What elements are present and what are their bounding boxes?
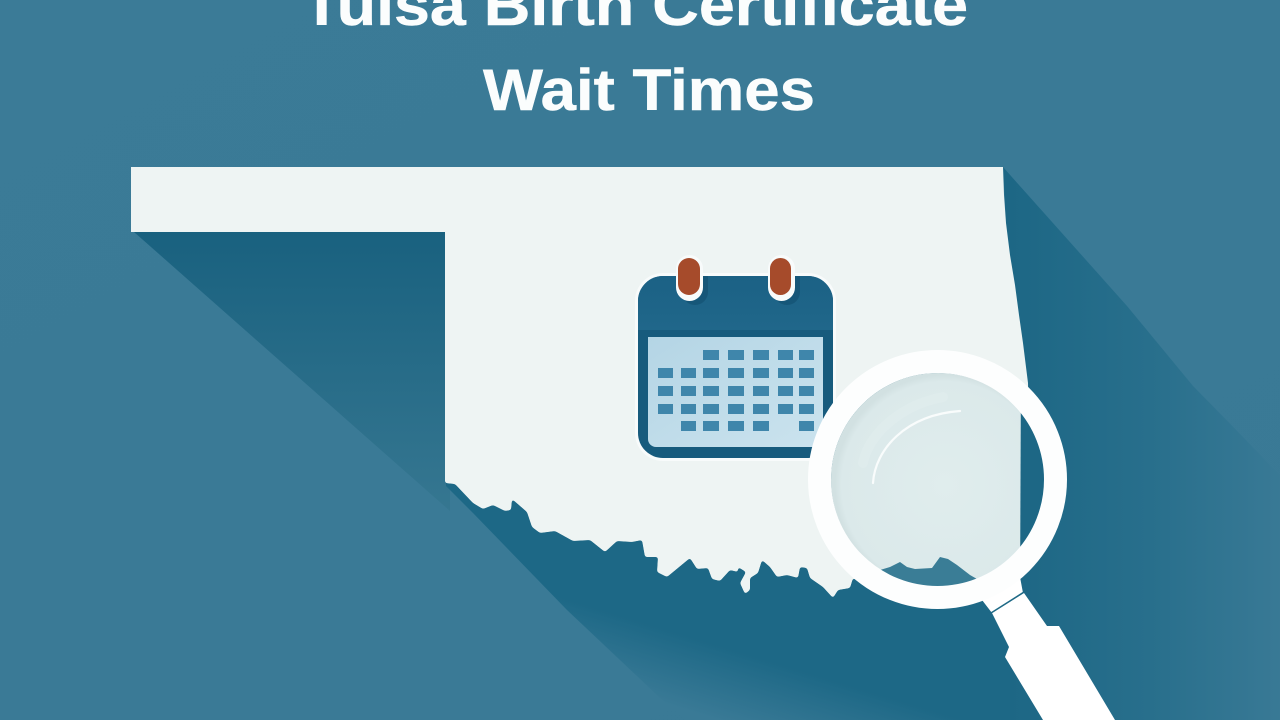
calendar date panel <box>648 337 823 447</box>
title <box>302 0 968 123</box>
calendar binding rings <box>676 255 800 305</box>
calendar date cells <box>658 350 814 431</box>
calendar header <box>638 276 833 330</box>
magnifier ring <box>820 362 1056 598</box>
magnifier handle <box>982 577 1115 720</box>
calendar white halo <box>635 273 836 461</box>
map of Oklahoma <box>131 167 1030 600</box>
long shadow of the map <box>134 167 1280 720</box>
magnifier lens contents <box>831 373 1030 586</box>
icon: magnifying glass <box>820 362 1115 720</box>
icon: calendar <box>635 255 836 461</box>
calendar body <box>638 276 833 458</box>
title: Wait Times <box>483 58 815 123</box>
